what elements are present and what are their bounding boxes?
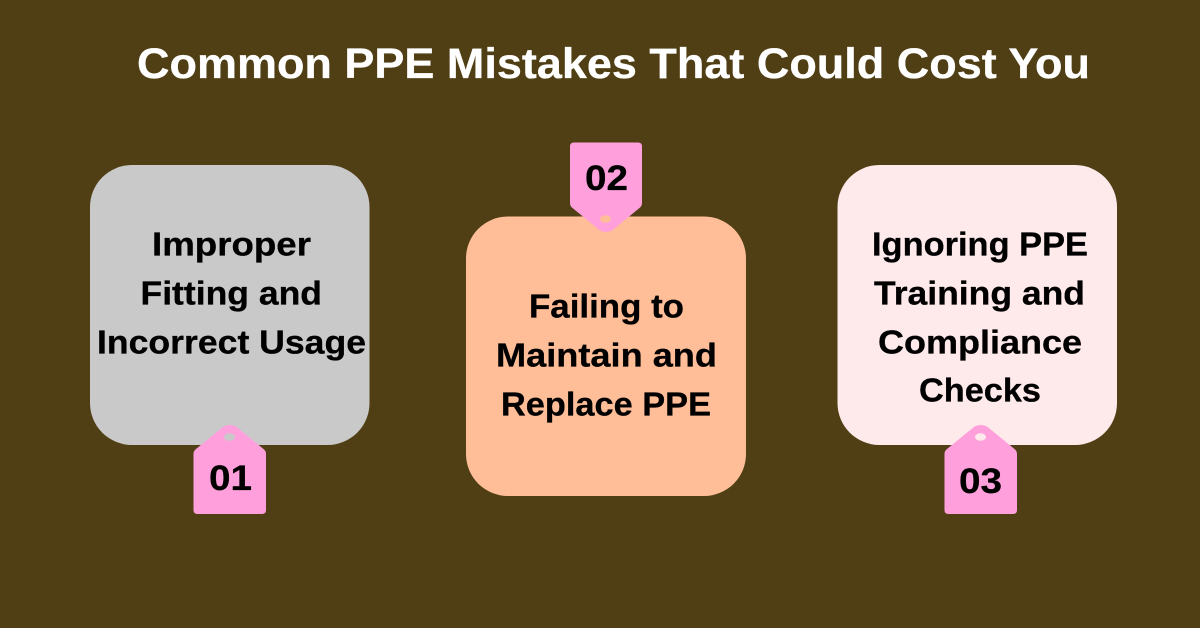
card 03 text: Ignoring PPE xyxy=(872,226,1088,262)
card 03 background xyxy=(838,165,1117,445)
card 01 background xyxy=(90,165,370,445)
card 03 text: Checks xyxy=(919,372,1041,408)
card 02 text: Replace PPE xyxy=(501,386,711,422)
tag 02 xyxy=(570,142,642,232)
tag 03 xyxy=(944,425,1017,514)
card 02 text: Failing to xyxy=(529,288,684,324)
tag 01: 01 xyxy=(209,459,252,498)
card 03 text: Compliance xyxy=(878,324,1082,360)
panel: card 03 ignoring training xyxy=(838,165,1117,514)
title: Common PPE Mistakes That Could Cost You xyxy=(137,40,1090,88)
card 02 background xyxy=(466,216,746,496)
tag 03: 03 xyxy=(959,462,1002,501)
card 01 text: Fitting and xyxy=(140,274,322,312)
card 03 text: Training and xyxy=(874,274,1085,312)
panel: card 02 failing to maintain xyxy=(466,142,746,496)
panel: card 01 improper fitting xyxy=(90,165,370,514)
card 01 text xyxy=(97,226,366,360)
card 03 text xyxy=(872,226,1088,408)
card 01 text: Incorrect Usage xyxy=(97,324,366,360)
card 01 text: Improper xyxy=(152,226,311,262)
tag 01 xyxy=(194,425,266,514)
tag 02: 02 xyxy=(585,159,628,198)
card 02 text xyxy=(496,288,717,422)
card 02 text: Maintain and xyxy=(496,336,717,374)
